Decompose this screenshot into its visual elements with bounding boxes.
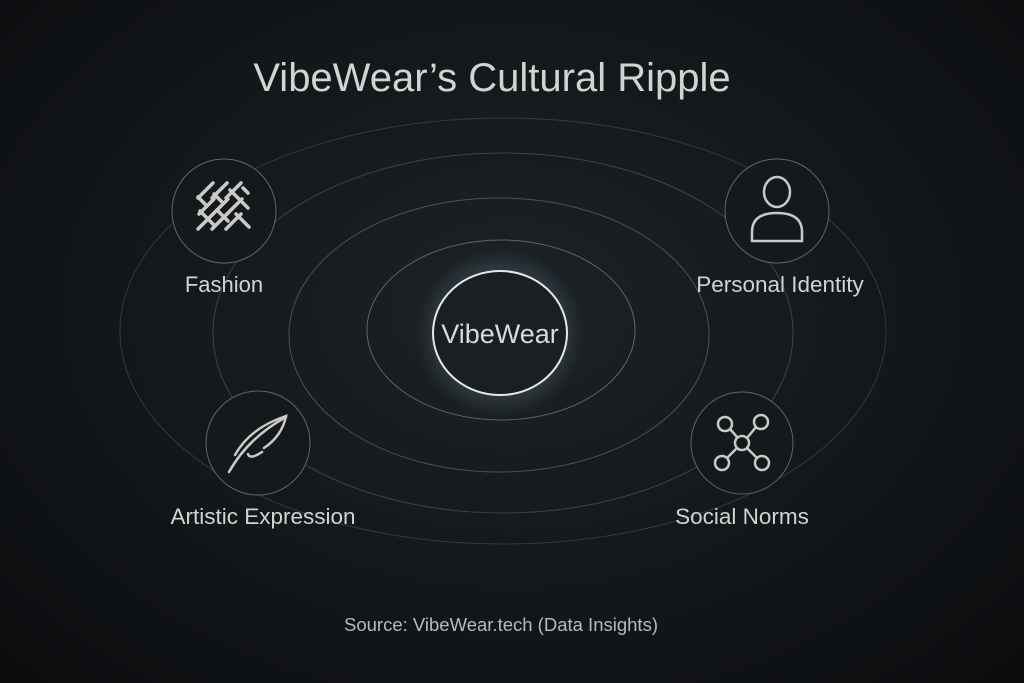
node: Social Norms: Social Norms	[675, 504, 809, 529]
center node: VibeWear	[415, 248, 585, 418]
node: Artistic Expression	[170, 391, 356, 529]
center node: VibeWear: VibeWear	[441, 319, 559, 349]
node: Artistic Expression: Artistic Expression	[170, 504, 356, 529]
ripple rings	[120, 118, 886, 544]
icon: woven fabric	[198, 183, 249, 229]
title: VibeWear’s Cultural Ripple	[253, 56, 731, 100]
node: Fashion: Fashion	[185, 272, 263, 297]
icon: feather	[229, 416, 286, 472]
icon: network	[715, 415, 769, 470]
node: Personal Identity	[696, 159, 865, 297]
node: Personal Identity: Personal Identity	[696, 272, 865, 297]
node: Social Norms	[675, 392, 809, 529]
source note: Source: VibeWear.tech (Data Insights)	[344, 614, 658, 635]
node: Fashion	[172, 159, 276, 297]
icon: person	[752, 177, 802, 241]
